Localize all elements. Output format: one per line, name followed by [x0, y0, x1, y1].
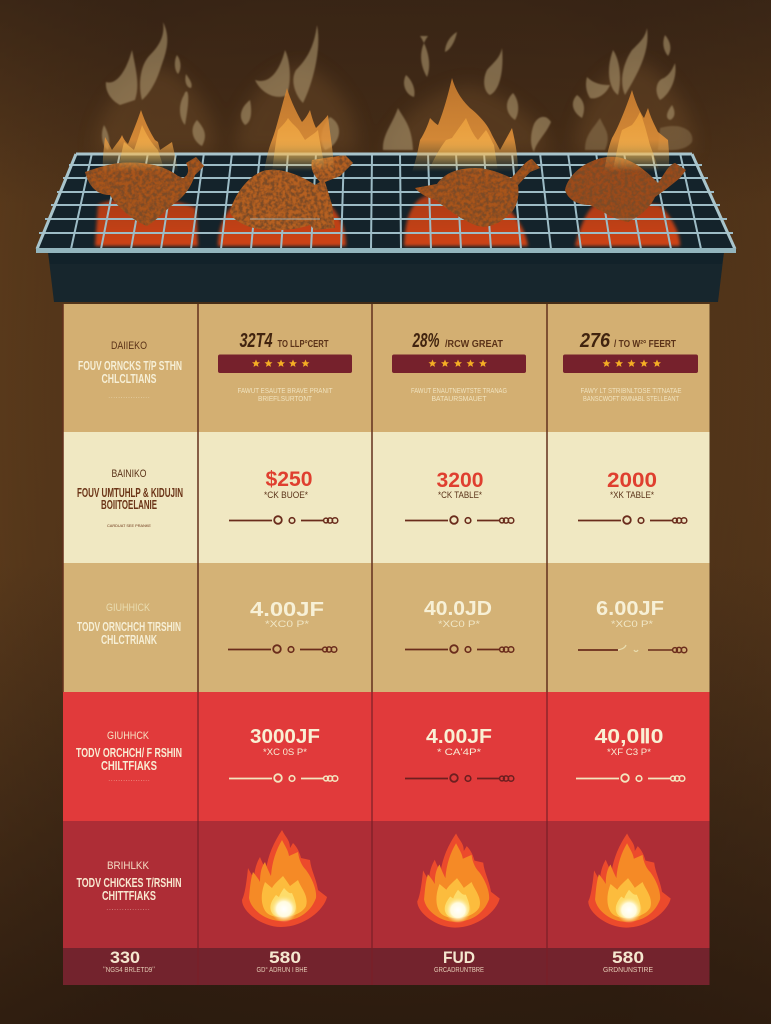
total column 2	[256, 949, 308, 974]
total column 2: GD° ADRUN I BHE	[256, 966, 308, 974]
total column 4: GRDNUNSTIRE	[603, 967, 653, 974]
row 5: heat label: ·················	[106, 908, 150, 912]
smoke flames behind the grill	[95, 22, 693, 153]
amount column 4: *XC0 P*	[611, 619, 654, 629]
price column 2	[229, 468, 338, 524]
amount column 2: *XC 0S P*	[263, 747, 308, 757]
amount column 3	[405, 726, 514, 782]
grill: pan	[48, 252, 724, 302]
rating column 4: BANSCWOFT RMNABL STELLEANT	[583, 396, 680, 403]
row 2: prices	[77, 468, 687, 528]
total column 1: ʻʻNGS4 BRLETD9ʻʻ	[103, 966, 155, 974]
row 2 label	[77, 468, 183, 528]
row 3 label: GIUHHICK	[106, 602, 151, 614]
amount column 3: * CA'4P*	[437, 747, 482, 757]
row 1 label: CHLCLTIANS	[102, 372, 156, 386]
rating column 2	[218, 330, 352, 403]
grill: grate bed with coals	[37, 154, 735, 249]
row 2 label: FOUV UMTUHLP & KIDUJIN	[77, 486, 183, 500]
grill: wire grid	[39, 153, 733, 249]
rating column 2: TO LLP°CERT	[278, 338, 329, 350]
total column 4	[603, 949, 653, 974]
price column 3: 3200	[436, 469, 484, 492]
rating column 2: FAWUT ESAUTE BRAVE PRANIT	[238, 388, 333, 395]
price column 2: *CK BUOE*	[264, 490, 308, 501]
chicken 1	[85, 157, 204, 226]
rating column 3	[392, 330, 526, 403]
row 4 label: CHILTFIAKS	[101, 759, 157, 773]
total column 3: GRCADRUNTBRE	[434, 967, 484, 974]
amount column 3	[405, 598, 514, 653]
amount column 4	[578, 598, 687, 653]
amount column 3: 4.00JF	[426, 726, 492, 748]
row 4 label	[76, 730, 182, 783]
rating column 4: FAWY LT STRIBNLTOSE TITNATAE	[580, 388, 682, 395]
row 4 label: TODV ORCHCH/ F RSHIN	[76, 746, 182, 760]
row 4 label: ·················	[108, 779, 150, 783]
chicken 3	[415, 159, 540, 227]
rating column 3: BATAURSMAUET	[432, 396, 487, 403]
amount column 2: 4.00JF	[250, 599, 324, 621]
chicken 2	[230, 155, 353, 230]
total column 1: 330	[110, 949, 140, 967]
amount column 2: *XC0 P*	[265, 619, 310, 629]
row 1 label: ·················	[108, 396, 150, 400]
total column 3: FUD	[443, 949, 475, 967]
row 3 label: TODV ORNCHCH TIRSHIN	[77, 620, 181, 634]
rating column 4: / TO W²° FEERT	[614, 338, 676, 350]
price column 3: *CK TABLE*	[438, 490, 482, 501]
total column 1	[103, 949, 155, 974]
amount column 3: *XC0 P*	[438, 619, 481, 629]
row 2 label: BAINIKO	[112, 468, 147, 480]
row 1: ratings	[78, 330, 698, 403]
price column 4: *XK TABLE*	[610, 490, 654, 501]
rating column 3: FAWUT ENAUTNEWTSTE TRANAG	[411, 388, 507, 395]
icon: flame column 3	[417, 834, 500, 928]
total column 2: 580	[269, 949, 301, 967]
icon: flame column 4	[588, 834, 671, 928]
rating column 2: BRIEFLSURTONT	[258, 396, 313, 403]
amount column 3: 40.0JD	[424, 598, 492, 620]
grill: wires over chicken bottoms and frame	[36, 154, 736, 250]
rating column 3: /RCW GREAT	[445, 338, 504, 350]
row 5: heat label: CHITTFIAKS	[102, 889, 156, 903]
row 5: heat label	[76, 860, 182, 912]
amount column 2: 3000JF	[250, 726, 320, 748]
rating column 3: 28%	[412, 330, 440, 352]
rating column 4	[563, 330, 698, 403]
row 1 label: FOUV ORNCKS T/P STHN	[78, 359, 182, 373]
amount column 2	[229, 726, 338, 782]
row 6: totals	[103, 949, 653, 974]
amount column 4	[576, 726, 685, 782]
row 5: heat label: TODV CHICKES T/RSHIN	[76, 876, 182, 890]
total column 3	[434, 949, 484, 974]
row 1 label	[78, 340, 182, 400]
total column 4: 580	[612, 949, 644, 967]
row 5: heat label: BRIHLKK	[107, 860, 150, 872]
row 1 label: DAIIEKO	[111, 340, 147, 352]
orange flames rising over the grill	[103, 78, 669, 172]
row 3 label: CHLCTRIANK	[101, 633, 157, 647]
row 4 label: GIUHHCK	[107, 730, 150, 742]
amount column 4: 40,0Ⅱ0	[594, 726, 664, 748]
rating column 4: 276	[579, 330, 611, 352]
amount column 4: 6.00JF	[596, 598, 664, 620]
row 3 label	[77, 602, 181, 647]
amount column 2	[228, 599, 337, 653]
price column 4	[578, 469, 687, 524]
amount column 4: *XF C3 P*	[607, 747, 652, 757]
row 2 label: BOIITOELANIE	[101, 498, 157, 512]
row 3: amounts on tan	[77, 598, 687, 653]
price column 4: 2000	[607, 469, 657, 492]
table backgrounds	[63, 304, 710, 985]
icon: flame column 2	[242, 830, 327, 927]
rating column 2: 32T4	[240, 330, 272, 352]
price column 3	[405, 469, 514, 524]
chicken 4	[565, 157, 686, 222]
price column 2: $250	[266, 468, 312, 491]
row 2 label: CARDUAT SEE PRANKE	[107, 523, 151, 528]
row 4: amounts on red	[76, 726, 685, 783]
